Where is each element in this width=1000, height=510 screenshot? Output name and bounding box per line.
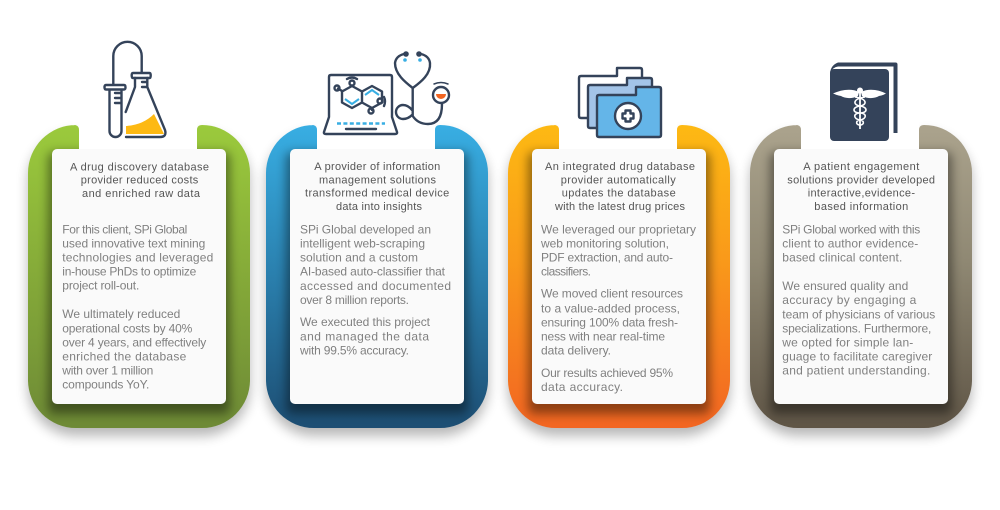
body text: card 3: We moved client resources — [541, 286, 683, 300]
body text: card 4: client to author evidence- — [782, 236, 918, 250]
body text: card 4: guage to facilitate caregiver — [782, 350, 932, 364]
heading: card 3: An integrated drug database — [545, 161, 695, 173]
body text: card 1: project roll-out. — [62, 278, 139, 292]
heading: card 1: and enriched raw data — [82, 188, 201, 200]
heading: card 4: based information — [814, 201, 908, 213]
body text: card 1: enriched the database — [62, 350, 187, 364]
body text: card 3 — [540, 222, 696, 394]
body text: card 3: classifiers. — [541, 264, 591, 278]
body text: card 1 — [61, 222, 213, 392]
body text: card 2: AI-based auto-classifier that — [300, 264, 446, 278]
body text: card 3: ness with near real-time — [541, 330, 665, 344]
panel: patient engagement — [750, 62, 972, 436]
body text: card 2: over 8 million reports. — [300, 293, 409, 307]
body text: card 1: in-house PhDs to optimize — [62, 264, 197, 278]
panel background: blue — [266, 110, 488, 436]
body text: card 3: PDF extraction, and auto- — [541, 250, 673, 264]
body text: card 3: Our results achieved 95% — [541, 366, 673, 380]
body text: card 1: operational costs by 40% — [62, 322, 193, 336]
body text: card 4: SPi Global worked with this — [782, 222, 920, 236]
heading: card 1 — [70, 162, 209, 200]
body text: card 2: We executed this project — [300, 315, 431, 329]
heading: card 4: interactive,evidence- — [808, 188, 915, 200]
heading: card 2: transformed medical device — [305, 188, 449, 200]
heading: card 2 — [305, 161, 449, 213]
heading: card 3: updates the database — [562, 188, 676, 200]
body text: card 3: to a value-added process, — [541, 302, 680, 316]
panel: medical device data — [266, 51, 488, 436]
heading: card 2: management solutions — [319, 174, 436, 186]
heading: card 3 — [545, 161, 695, 213]
heading: card 4: A patient engagement — [803, 161, 919, 173]
body text: card 4 — [781, 222, 935, 378]
icon: test tube and flask — [104, 42, 165, 137]
body text: card 2: SPi Global developed an — [300, 222, 431, 236]
heading: card 4 — [787, 161, 935, 213]
body text: card 1: used innovative text mining — [62, 236, 205, 250]
body text: card 3: ensuring 100% data fresh- — [541, 316, 678, 330]
body text: card 2: accessed and documented — [300, 279, 451, 293]
body text: card 2: with 99.5% accuracy. — [299, 344, 409, 358]
heading: card 3: with the latest drug prices — [554, 201, 686, 213]
body text: card 4: and patient understanding. — [782, 364, 930, 378]
body text: card 1: with over 1 million — [61, 364, 153, 378]
body text: card 2: and managed the data — [300, 330, 429, 344]
panel background: taupe — [750, 110, 972, 436]
panel background: green — [28, 110, 250, 436]
body text: card 4: accuracy by engaging a — [782, 293, 917, 307]
icon: medical folders — [579, 68, 661, 137]
body text: card 2: intelligent web-scraping — [300, 236, 425, 250]
heading: card 1: A drug discovery database — [70, 162, 209, 174]
icon: laptop, molecule and stethoscope — [324, 51, 449, 134]
body text: card 3: data accuracy. — [541, 380, 623, 394]
body text: card 3: We leveraged our proprietary — [541, 222, 696, 236]
body text: card 2: solution and a custom — [300, 250, 418, 264]
heading: card 3: provider automatically — [561, 174, 676, 186]
body text: card 4: we opted for simple lan- — [781, 336, 913, 350]
body text: card 4: specializations. Furthermore, — [782, 322, 931, 336]
body text: card 4: team of physicians of various — [782, 308, 935, 322]
body text: card 4: based clinical content. — [782, 250, 902, 264]
panel: drug discovery database — [28, 42, 250, 436]
body text: card 1: For this client, SPi Global — [62, 222, 187, 236]
body text: card 1: over 4 years, and effectively — [62, 336, 206, 350]
heading: card 4: solutions provider developed — [787, 174, 935, 186]
panel: drug prices database — [508, 68, 730, 436]
heading: card 1: provider reduced costs — [81, 174, 199, 186]
body text: card 3: web monitoring solution, — [540, 236, 669, 250]
heading: card 2: A provider of information — [314, 161, 440, 173]
body text: card 4: We ensured quality and — [782, 279, 908, 293]
icon: medical book with caduceus — [830, 62, 898, 141]
heading: card 2: data into insights — [336, 201, 422, 213]
panel background: orange — [508, 110, 730, 436]
body text: card 1: We ultimately reduced — [62, 307, 180, 321]
body text: card 2 — [299, 222, 451, 358]
body text: card 1: technologies and leveraged — [62, 250, 213, 264]
body text: card 3: data delivery. — [541, 344, 611, 358]
body text: card 1: compounds YoY. — [62, 378, 149, 392]
